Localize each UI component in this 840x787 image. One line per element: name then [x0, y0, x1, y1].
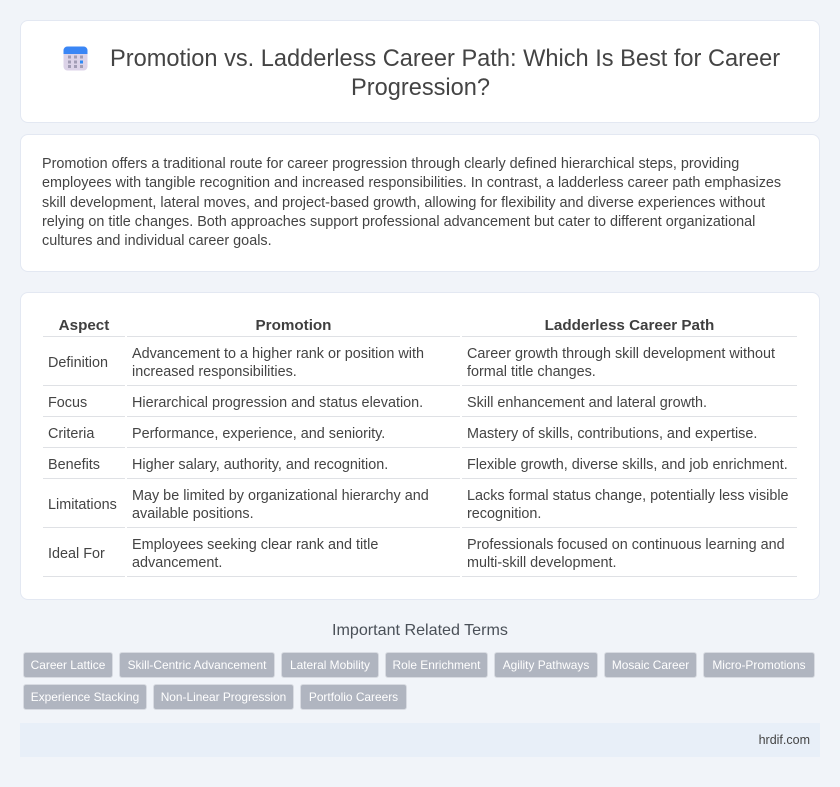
Ideal For: Ladderless: multi-skill development.: [467, 555, 617, 571]
tag: Agility Pathways: [503, 658, 589, 672]
Focus: Ladderless: Skill enhancement and lateral growth.: [467, 395, 707, 411]
Criteria: Promotion: Performance, experience, and seniority.: [132, 426, 385, 442]
tag: Skill-Centric Advancement: [128, 658, 266, 672]
tag: Experience Stacking: [31, 690, 139, 704]
Definition: Promotion: increased responsibilities.: [132, 364, 297, 380]
Benefits: Ladderless: Flexible growth, diverse skills, and job enrichment.: [467, 457, 788, 473]
tag: [703, 652, 815, 678]
tag: [23, 652, 113, 678]
text block: introduction: Promotion offers a traditional route for career progression through clearly defined hierarchical steps, providing: [42, 156, 739, 172]
table header: Aspect: Aspect: [59, 317, 109, 334]
Limitations: Ladderless: Lacks formal status change, potentially less visible: [467, 488, 789, 504]
Ideal For: Ladderless: [467, 537, 785, 571]
tag: Non-Linear Progression: [161, 690, 286, 704]
table header: Promotion: Promotion: [256, 317, 331, 334]
title: Progression?: [351, 75, 490, 101]
Limitations: Promotion: May be limited by organizational hierarchy and: [132, 488, 429, 504]
Limitations: Ladderless: [467, 488, 789, 522]
tag: Role Enrichment: [393, 658, 480, 672]
row: Benefits: Benefits: [48, 457, 100, 473]
Definition: Ladderless: Career growth through skill development without: [467, 346, 775, 362]
tag: [153, 684, 294, 710]
Ideal For: Promotion: Employees seeking clear rank and title: [132, 537, 378, 553]
panel: title header: [20, 20, 820, 123]
tag: [604, 652, 697, 678]
panel: introduction: [20, 134, 820, 272]
tag: Portfolio Careers: [309, 690, 398, 704]
footer bar: [20, 723, 820, 757]
tag: Career Lattice: [31, 658, 105, 672]
tag: Mosaic Career: [612, 658, 689, 672]
Limitations: Ladderless: recognition.: [467, 506, 541, 522]
tag: Micro-Promotions: [712, 658, 806, 672]
icon: calendar: [64, 46, 88, 70]
tag: [300, 684, 407, 710]
Ideal For: Promotion: advancement.: [132, 555, 222, 571]
Focus: Promotion: Hierarchical progression and status elevation.: [132, 395, 423, 411]
tag: [494, 652, 598, 678]
text block: introduction: skill development, lateral moves, and project-based growth, allowing for flexibility and diverse experiences without: [42, 195, 765, 211]
row: Limitations: Limitations: [48, 497, 117, 513]
row: Criteria: Criteria: [48, 426, 94, 442]
row: Definition: Definition: [48, 355, 108, 371]
title: [110, 46, 780, 101]
Definition: Promotion: Advancement to a higher rank or position with: [132, 346, 424, 362]
Definition: Ladderless: [467, 346, 775, 380]
tag list: related terms: [23, 652, 815, 710]
Criteria: Ladderless: Mastery of skills, contributions, and expertise.: [467, 426, 757, 442]
Benefits: Promotion: Higher salary, authority, and recognition.: [132, 457, 388, 473]
heading: related terms: Important Related Terms: [332, 621, 508, 639]
table header: Ladderless Career Path: Ladderless Career Path: [545, 317, 714, 334]
tag: [119, 652, 275, 678]
Definition: Promotion: [132, 346, 424, 380]
Ideal For: Promotion: [132, 537, 378, 571]
tag: [281, 652, 379, 678]
row: Ideal For: Ideal For: [48, 546, 105, 562]
footer text: hrdif.com: [759, 733, 810, 747]
Limitations: Promotion: available positions.: [132, 506, 254, 522]
tag: Lateral Mobility: [290, 658, 370, 672]
text block: introduction: relying on title changes. Both approaches support professional advancement but cater to different organizational: [42, 214, 755, 230]
tag: [23, 684, 147, 710]
text block: introduction: cultures and individual career goals.: [42, 233, 272, 249]
Definition: Ladderless: formal title changes.: [467, 364, 596, 380]
Limitations: Promotion: [132, 488, 429, 522]
Ideal For: Ladderless: Professionals focused on continuous learning and: [467, 537, 785, 553]
title: Promotion vs. Ladderless Career Path: Which Is Best for Career: [110, 46, 780, 72]
text block: introduction: [42, 156, 781, 249]
text block: introduction: employees with tangible recognition and increased responsibilities. In contrast, a ladderless career path emphasizes: [42, 175, 781, 191]
row: Focus: Focus: [48, 395, 87, 411]
tag: [385, 652, 488, 678]
panel: comparison table: [20, 292, 820, 600]
